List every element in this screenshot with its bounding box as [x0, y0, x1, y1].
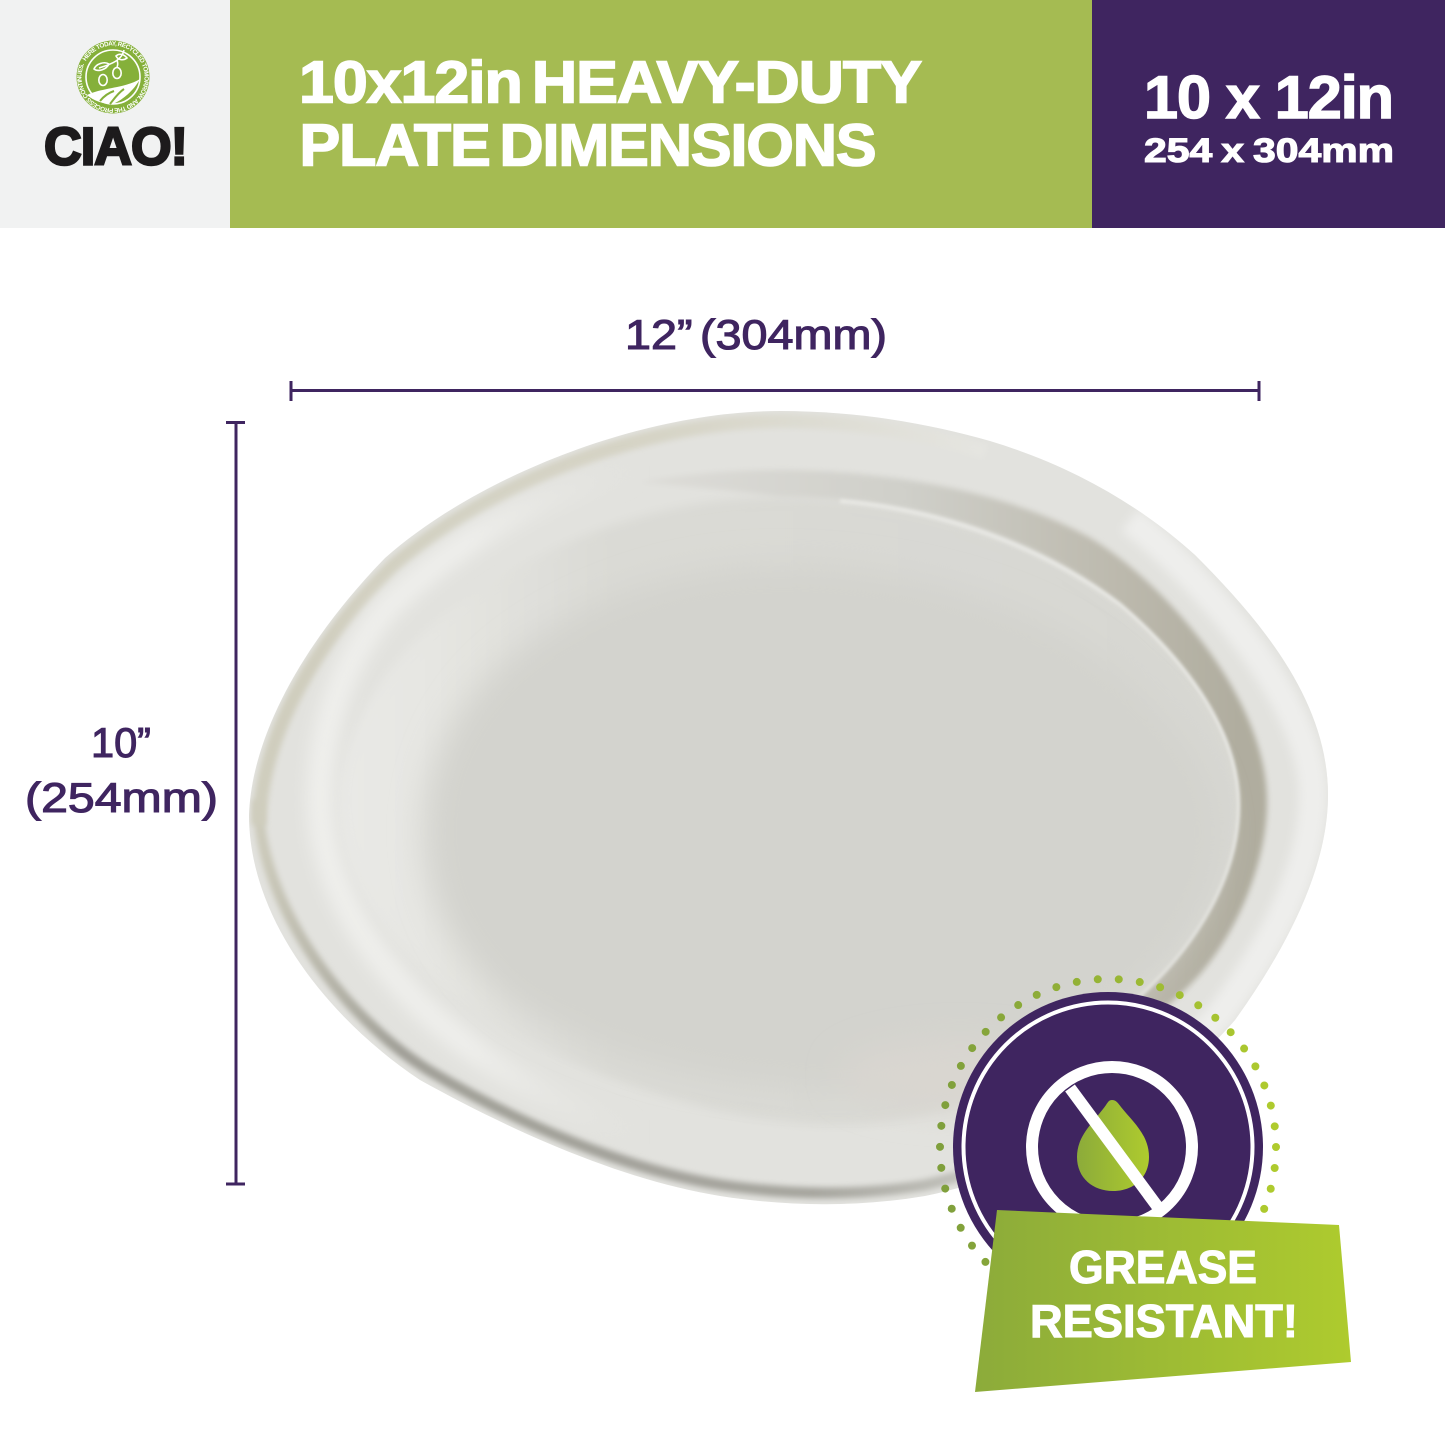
header banner	[0, 0, 1445, 228]
width dimension	[291, 311, 1259, 401]
purple disc	[953, 992, 1263, 1302]
white rim edge right	[1126, 514, 1326, 1036]
plate	[240, 405, 1335, 1215]
size callout	[1144, 64, 1394, 170]
label banner	[975, 1210, 1351, 1392]
grease drop	[1077, 1100, 1149, 1191]
size callout: 10 x 12in	[1144, 64, 1393, 131]
inner ridge highlight	[840, 501, 1238, 1020]
banner text: RESISTANT!	[1030, 1295, 1298, 1347]
panel: size background	[1092, 0, 1445, 228]
icon: no grease	[1032, 1067, 1192, 1227]
width measure line	[291, 381, 1259, 401]
height label	[25, 719, 218, 821]
title	[299, 50, 922, 178]
well	[420, 632, 602, 1021]
dotted ring	[940, 979, 1276, 1315]
width label: 12” (304mm)	[625, 311, 887, 358]
logo: CIAO!	[44, 40, 187, 176]
panel: title background	[230, 0, 1092, 228]
well lower warm tone	[840, 1040, 1080, 1110]
outer rim shadow bottom left	[258, 800, 1040, 1193]
left shoulder highlight	[309, 520, 503, 1071]
height label: (254mm)	[25, 774, 218, 821]
height measure line	[226, 422, 245, 1184]
prohibition sign	[1032, 1067, 1192, 1227]
logo wordmark: CIAO!	[44, 118, 187, 176]
banner text: GREASE	[1069, 1241, 1257, 1293]
height dimension	[25, 422, 245, 1184]
panel: logo background	[0, 0, 230, 228]
inner trough right	[686, 470, 1270, 1006]
banner text	[1030, 1241, 1298, 1347]
white inner ring	[964, 1002, 1252, 1292]
outer rim shading top left	[251, 414, 856, 824]
title: PLATE DIMENSIONS	[300, 112, 876, 178]
badge: grease resistant	[940, 979, 1351, 1392]
title: 10x12in HEAVY-DUTY	[299, 50, 922, 116]
icon: green olive seal: HERE TODAY, RECYCLED TOMORROW. AND THE PROCESS CONTINUES.	[77, 41, 149, 113]
plate inner area	[593, 502, 1234, 1120]
height label: 10”	[91, 719, 151, 766]
size callout: 254 x 304mm	[1144, 132, 1394, 170]
